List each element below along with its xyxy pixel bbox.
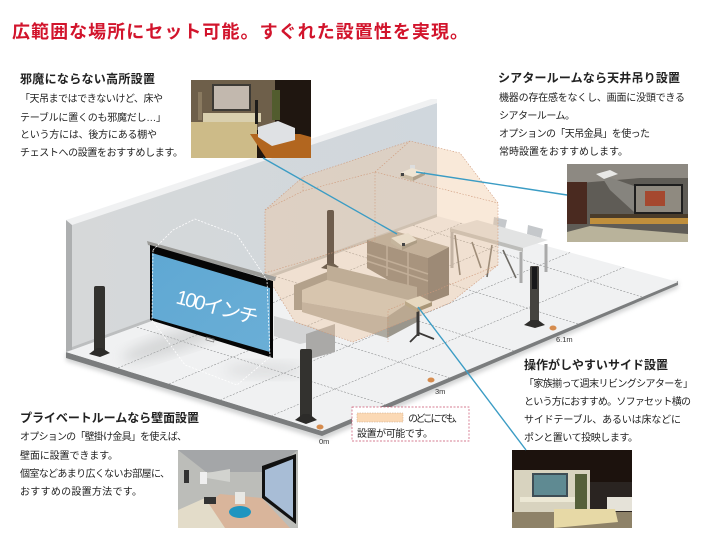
distance marker: 6.1m	[550, 326, 573, 344]
text block: high placement: 邪魔にならない高所設置	[20, 71, 155, 86]
speaker: front	[295, 349, 317, 424]
text block: wall placement: オプションの「壁掛け金具」を使えば、	[20, 430, 187, 443]
distance marker: 0m: 0m	[319, 437, 329, 446]
speaker: back	[321, 210, 339, 270]
screen size outline	[152, 219, 270, 385]
text block: high placement	[20, 71, 183, 159]
projector: shelf	[391, 233, 417, 250]
dining table with chairs	[450, 217, 548, 283]
wall	[66, 99, 437, 352]
text block: high placement: 「天吊まではできないけど、床や	[20, 93, 163, 105]
speaker: right	[524, 266, 545, 328]
text block: wall placement: 個室などあまり広くないお部屋に、	[20, 467, 170, 480]
side table	[410, 308, 434, 342]
text block: wall placement	[20, 411, 199, 498]
text block: side placement: サイドテーブル、あるいは床などに	[524, 413, 681, 426]
text block: ceiling placement	[498, 70, 685, 158]
title: 広範囲な場所にセット可能。すぐれた設置性を実現。	[12, 21, 468, 42]
distance marker: 3m: 3m	[435, 387, 445, 396]
photo: high placement	[191, 80, 311, 158]
text block: side placement: という方におすすめ。ソファセット横の	[524, 395, 691, 408]
leader line: side projector	[418, 307, 526, 450]
floor grid	[118, 217, 642, 416]
room illustration	[66, 99, 678, 440]
speaker: left	[89, 286, 110, 357]
text block: ceiling placement: シアタールーム。	[499, 110, 575, 122]
photo: wall placement	[178, 450, 298, 528]
photo: side placement	[512, 450, 632, 528]
callout: placement zone legend: のどこにでも、	[408, 413, 463, 425]
text block: high placement: チェストへの設置をおすすめします。	[20, 147, 183, 159]
text block: high placement: という方には、後方にある棚や	[20, 128, 157, 141]
text block: ceiling placement: 常時設置をおすすめします。	[499, 145, 628, 158]
text block: side placement: ポンと置いて投映します。	[524, 431, 638, 444]
text block: wall placement: おすすめの設置方法です。	[20, 485, 142, 498]
text block: ceiling placement: オプションの「天吊金具」を使った	[499, 127, 650, 140]
distance marker: 3m	[428, 378, 445, 396]
leader line: ceiling projector	[416, 172, 567, 195]
photo: ceiling placement	[567, 164, 688, 242]
floor shadows	[124, 328, 298, 378]
text block: side placement: 「家族揃って週末リビングシアターを」	[524, 377, 693, 390]
screen: 100 inch	[147, 241, 276, 358]
coffee table	[274, 316, 335, 360]
text block: wall placement: プライベートルームなら壁面設置	[20, 411, 199, 425]
projection zone	[265, 141, 498, 342]
floor	[66, 216, 678, 431]
text block: side placement: 操作がしやすいサイド設置	[524, 357, 668, 372]
projector: side table	[405, 296, 432, 312]
text block: side placement	[524, 357, 693, 444]
text block: ceiling placement: シアタールームなら天井吊り設置	[498, 70, 680, 85]
leader line: shelf projector	[263, 158, 397, 234]
sofa	[294, 265, 417, 338]
shelf	[367, 231, 449, 303]
floor edge	[66, 281, 678, 440]
text block: ceiling placement: 機器の存在感をなくし、画面に没頭できる	[499, 91, 685, 104]
callout: placement zone legend	[352, 407, 469, 441]
text block: wall placement: 壁面に設置できます。	[20, 450, 118, 462]
distance marker: 0m	[316, 424, 329, 446]
callout: placement zone legend: 設置が可能です。	[357, 427, 433, 440]
screen: 100 inch: 100インチ	[174, 287, 261, 330]
projector: ceiling	[400, 165, 425, 181]
text block: high placement: テーブルに置くのも邪魔だし…」	[20, 111, 166, 124]
distance marker: 6.1m: 6.1m	[556, 335, 573, 344]
